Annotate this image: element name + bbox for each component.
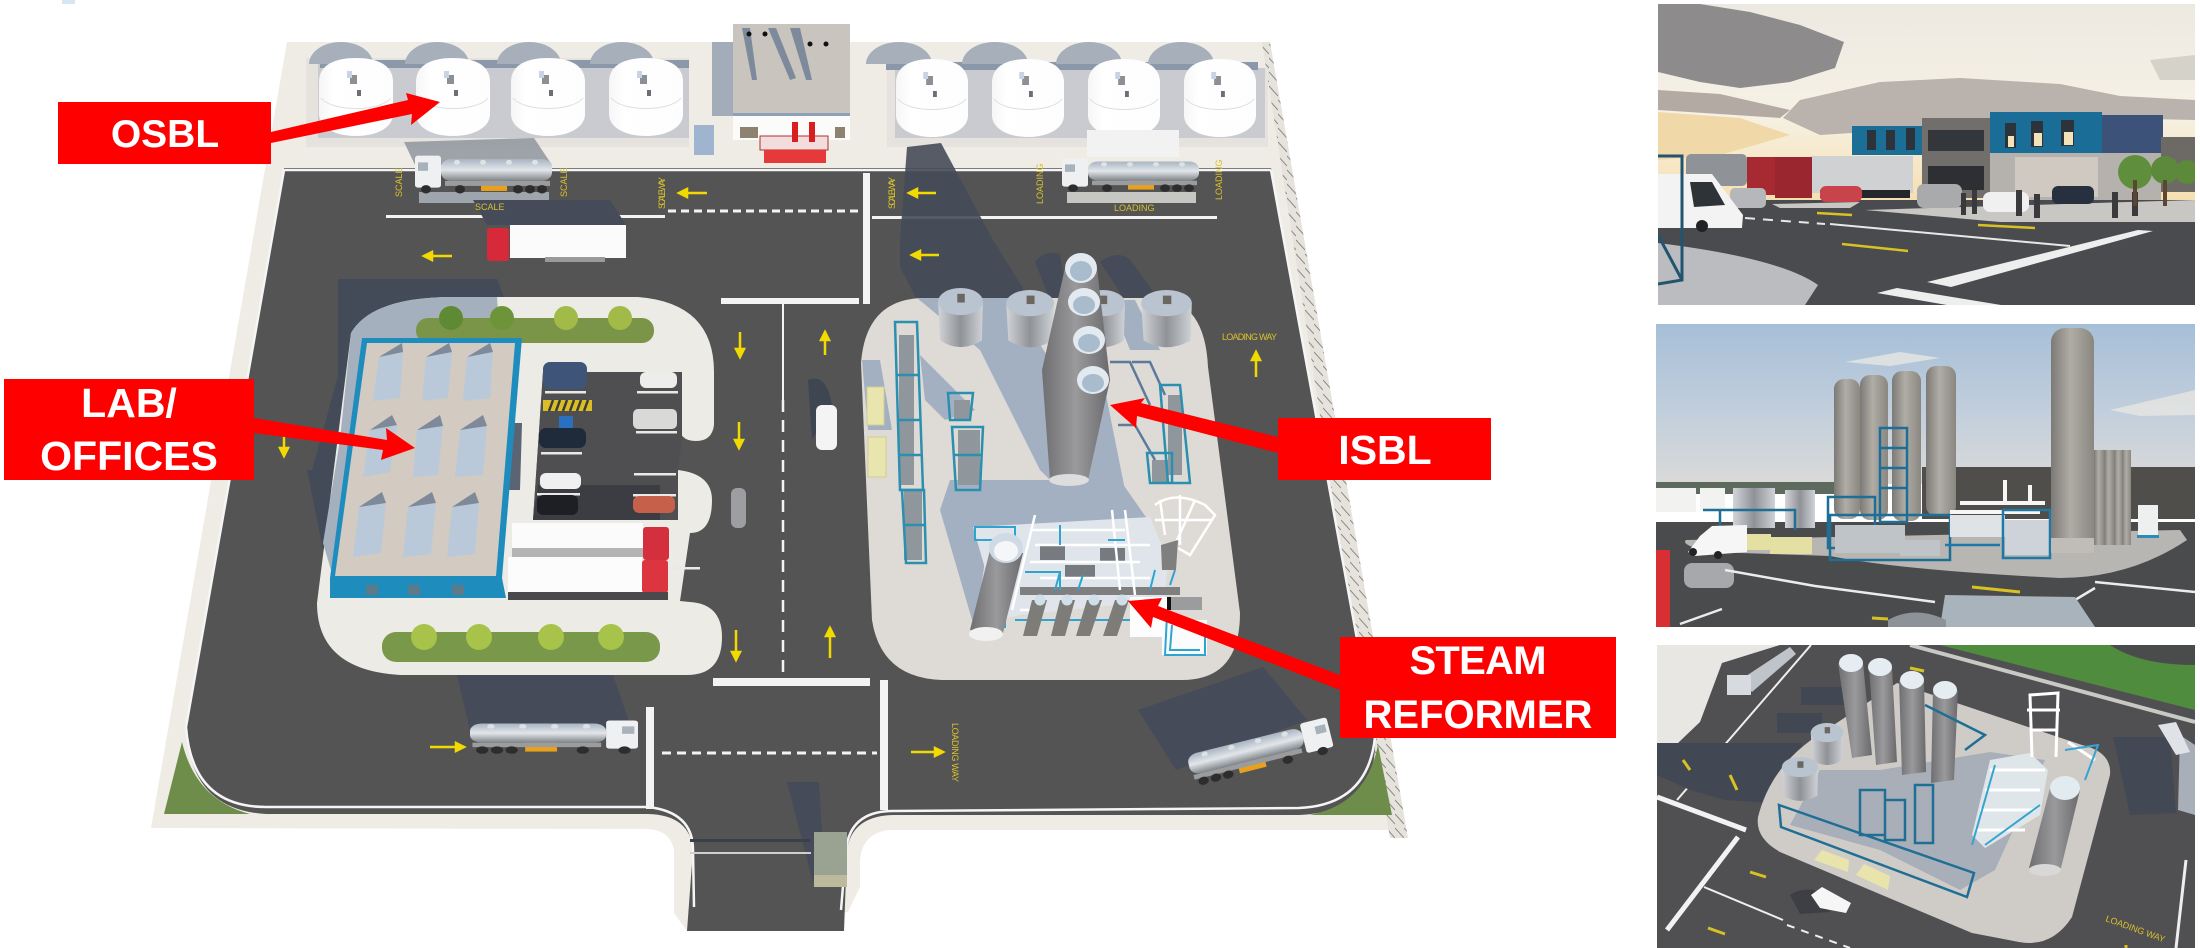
label box: STEAM REFORMER bbox=[1340, 637, 1616, 738]
sky bbox=[1658, 4, 2195, 204]
blue skid frames bbox=[1703, 497, 1950, 560]
lane markings bbox=[1657, 797, 1850, 948]
road edge lines bbox=[1677, 645, 1811, 800]
yellow containment boxes bbox=[867, 387, 886, 477]
hatched space bbox=[543, 400, 592, 411]
blue frame tower bbox=[1880, 428, 1907, 522]
accessible bay bbox=[559, 416, 573, 428]
cast shadows on island bbox=[862, 298, 1160, 630]
pavement lettering: LOADING WAY bbox=[2104, 913, 2166, 944]
callout: STEAM REFORMER: REFORMER bbox=[1364, 693, 1593, 737]
pad shadows bbox=[1790, 752, 2045, 890]
vehicle: silver car bbox=[731, 488, 746, 528]
building shadow bbox=[307, 279, 520, 577]
pavement lettering: SCALE WAY bbox=[887, 177, 897, 209]
callout: LAB/OFFICES: LAB/ bbox=[81, 380, 177, 426]
vehicle: loading tanker with canopy bbox=[1062, 130, 1199, 203]
white tanks in the distance bbox=[1656, 488, 1725, 512]
callout: STEAM REFORMER: STEAM bbox=[1410, 639, 1546, 683]
label box: LAB/OFFICES bbox=[4, 379, 254, 480]
solar panels bbox=[353, 352, 493, 557]
pavement lettering bbox=[394, 159, 1277, 782]
fire pump skid bbox=[760, 122, 828, 163]
pavement lettering: LOADING bbox=[1114, 203, 1155, 213]
frame shadows bbox=[1110, 362, 1165, 460]
grass corners bbox=[164, 742, 1392, 815]
road markings bbox=[386, 173, 1217, 810]
storage tanks, west row bbox=[319, 58, 683, 136]
callout: LAB/OFFICES bbox=[4, 379, 415, 480]
yellow containment boxes bbox=[1747, 534, 1812, 554]
callout: ISBL: ISBL bbox=[1338, 427, 1432, 473]
pavement lettering: SCALE bbox=[559, 167, 569, 197]
asphalt roads bbox=[186, 168, 1375, 931]
pavement lettering: LOADING WAY bbox=[950, 723, 960, 782]
long tower shadows bbox=[900, 143, 1157, 300]
sidewalks bbox=[1772, 200, 2195, 222]
front column bbox=[2029, 776, 2080, 876]
small forklift bbox=[694, 125, 714, 155]
dark field patch bbox=[2110, 645, 2195, 665]
parked cars bbox=[1730, 184, 2094, 212]
pavement lettering: SCALE WAY bbox=[657, 177, 667, 209]
panel: office building render bbox=[1658, 4, 2199, 305]
concrete pad bbox=[1685, 530, 2187, 578]
big shadows bbox=[1657, 687, 1847, 803]
parking lot bbox=[533, 372, 682, 520]
callout: ISBL bbox=[1110, 398, 1491, 480]
large column bbox=[2051, 328, 2094, 553]
white piping skid bbox=[1945, 480, 2051, 558]
island paving bbox=[317, 297, 722, 675]
road markings bbox=[1745, 213, 2153, 305]
office island bbox=[307, 279, 722, 675]
yellow containment boxes bbox=[1814, 850, 1890, 890]
arrow: LAB/OFFICES bbox=[254, 418, 415, 460]
reformer tubes bbox=[2094, 450, 2131, 545]
reformer tubes bbox=[1023, 594, 1129, 636]
silver tanks bbox=[1782, 723, 1843, 801]
office building bbox=[330, 338, 522, 598]
background wall bbox=[1922, 467, 2195, 519]
parked box trucks bbox=[508, 523, 669, 600]
callout: OSBL bbox=[58, 93, 440, 164]
arrow: OSBL bbox=[271, 93, 440, 143]
white skid bbox=[2137, 505, 2159, 538]
vehicle: van bbox=[808, 378, 837, 450]
dashed lane lines bbox=[662, 211, 877, 753]
sky bbox=[1656, 324, 2195, 484]
people bbox=[1961, 190, 2138, 218]
pavement lettering: LOADING bbox=[1214, 159, 1224, 200]
right road edge bbox=[2176, 860, 2186, 948]
panel supports bbox=[359, 343, 493, 507]
foreground curb bbox=[1658, 243, 1818, 305]
office building bbox=[1852, 112, 2195, 200]
OSBL bund bbox=[306, 42, 1268, 147]
silver tanks bbox=[1733, 488, 1815, 528]
trucks and trailer bbox=[1686, 154, 1913, 198]
white van bbox=[1688, 525, 1747, 559]
horizon band bbox=[1656, 482, 1834, 494]
fence bbox=[1910, 645, 2195, 722]
road bbox=[1658, 200, 2195, 305]
yellow arrows bbox=[1683, 668, 2126, 948]
trees bbox=[2118, 155, 2199, 206]
road bbox=[1656, 522, 2195, 627]
panel: aerial process unit render bbox=[1657, 645, 2195, 948]
fence strip bbox=[1262, 42, 1408, 838]
yellow direction arrows bbox=[280, 189, 1260, 756]
grass bbox=[1940, 645, 2195, 710]
clouds bbox=[1658, 4, 2195, 160]
pavement lettering: LOADING WAY bbox=[1222, 332, 1277, 342]
callout: OSBL: OSBL bbox=[111, 113, 219, 156]
yellow arrows bbox=[1872, 587, 2020, 619]
tank farm corner bbox=[1657, 645, 1780, 763]
red truck edge bbox=[1656, 550, 1670, 627]
pavement lettering: SCALE bbox=[475, 202, 505, 212]
vehicle: white and red truck bbox=[473, 200, 626, 262]
label box: ISBL bbox=[1278, 418, 1491, 480]
reformer structure bbox=[973, 495, 1215, 655]
blue equipment frames bbox=[895, 322, 1190, 563]
lower planter bbox=[382, 624, 660, 662]
pavement lettering: LOADING bbox=[1035, 163, 1045, 204]
vehicle: lower tanker with shadow bbox=[457, 675, 638, 754]
process equipment bbox=[1835, 525, 1940, 556]
label box: OSBL bbox=[58, 102, 271, 164]
callout: STEAM REFORMER bbox=[1128, 598, 1616, 738]
foreground tanker bbox=[1888, 595, 2095, 627]
process equipment bbox=[899, 335, 1182, 560]
vehicle: angled tanker with shadow bbox=[1138, 667, 1335, 787]
arrow: ISBL bbox=[1110, 398, 1278, 453]
road lines bbox=[1680, 570, 2195, 624]
corner mark bbox=[62, 0, 75, 4]
arrow: STEAM REFORMER bbox=[1128, 598, 1340, 690]
white van bbox=[1790, 887, 1851, 914]
curb lines bbox=[186, 170, 1375, 910]
panel: process unit render bbox=[1656, 324, 2195, 627]
callout: LAB/OFFICES: OFFICES bbox=[40, 433, 218, 479]
reformer structure bbox=[1972, 693, 2098, 848]
front column bbox=[969, 533, 1023, 641]
blue equipment frames bbox=[1779, 705, 1985, 897]
silver car bbox=[1684, 563, 1734, 588]
ISBL process island bbox=[861, 253, 1240, 680]
tall columns bbox=[1042, 253, 1110, 486]
storage tanks, east row bbox=[896, 59, 1256, 137]
parking lot shadow bbox=[533, 485, 660, 520]
vehicle: scale tanker bbox=[404, 138, 552, 203]
parking bays bbox=[537, 391, 700, 570]
parked tanker and shadow bbox=[2113, 722, 2195, 815]
concrete pad bbox=[1758, 683, 2110, 943]
four tall columns bbox=[1838, 654, 1958, 783]
white van bbox=[1658, 174, 1743, 232]
loading tanker bbox=[1727, 647, 1796, 695]
gas-filled equipment blocks bbox=[1040, 545, 1125, 577]
vertical tanks bbox=[938, 288, 1192, 347]
central utility building bbox=[733, 24, 850, 140]
road bbox=[1657, 645, 2195, 948]
panel: main site plan bbox=[151, 24, 1408, 931]
upper planter bbox=[416, 306, 654, 343]
site concrete bbox=[151, 42, 1403, 931]
blue frame bbox=[1658, 156, 1682, 284]
parked cars bbox=[537, 362, 677, 515]
gate and guardhouse bbox=[690, 782, 847, 887]
tall columns bbox=[1834, 366, 1956, 521]
clouds bbox=[1845, 352, 2195, 416]
pavement lettering: SCALE bbox=[394, 167, 404, 197]
